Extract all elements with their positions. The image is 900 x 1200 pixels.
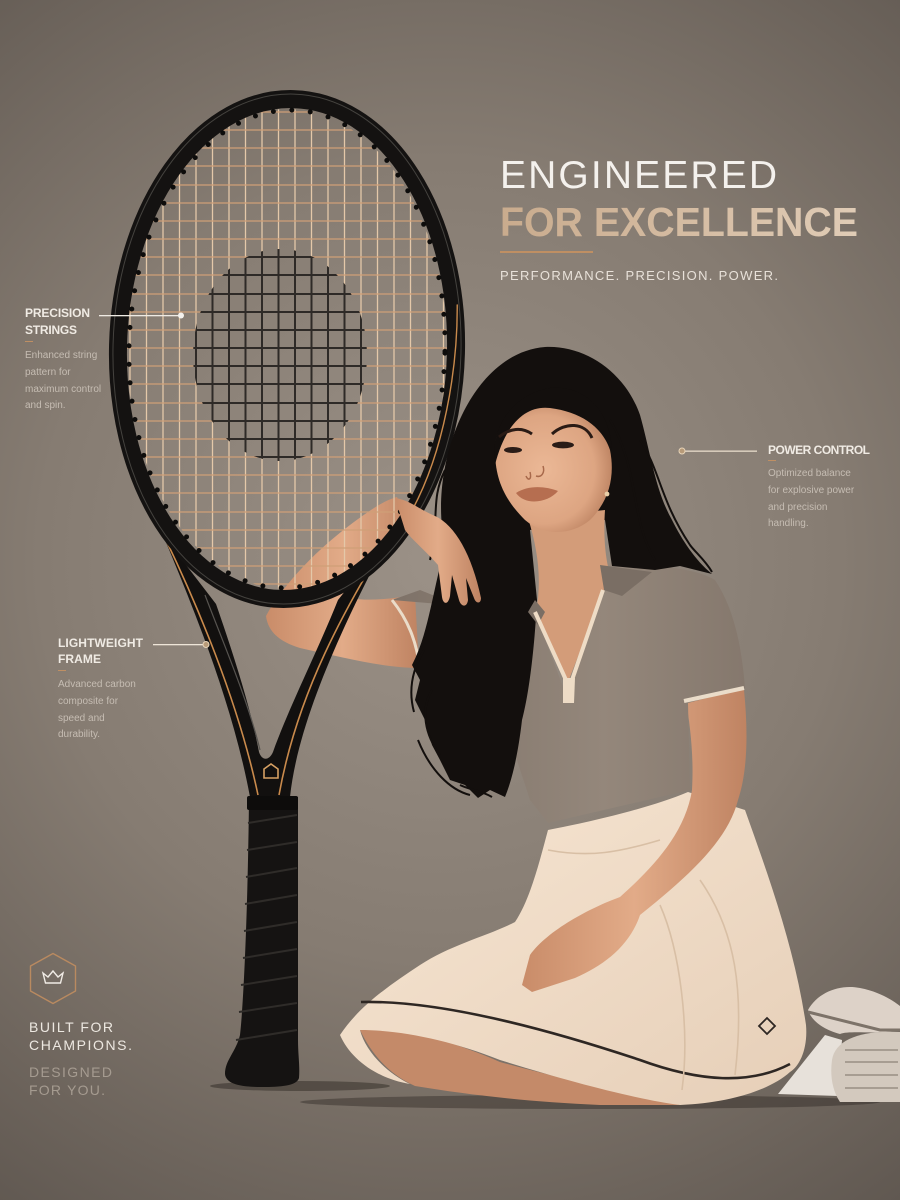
collar and placket bbox=[528, 565, 652, 703]
racket butt cap and grip bbox=[225, 796, 299, 1087]
seated woman bbox=[340, 347, 900, 1105]
sign-off secondary: DESIGNED bbox=[29, 1064, 112, 1080]
shirt bbox=[392, 563, 745, 823]
hair bbox=[412, 347, 712, 798]
callout heading: POWER CONTROL bbox=[768, 443, 870, 457]
title line 1: ENGINEERED bbox=[500, 154, 777, 197]
callout description: and precision bbox=[768, 502, 827, 513]
callout description: composite for bbox=[58, 696, 119, 707]
icon: hexagon crown bbox=[30, 954, 76, 1004]
woman's arm behind racket bbox=[266, 497, 419, 668]
leader line bbox=[99, 315, 179, 316]
legs bbox=[360, 1029, 680, 1105]
callout description: pattern for bbox=[25, 367, 71, 378]
callout description: speed and bbox=[58, 713, 105, 724]
tagline: PERFORMANCE. PRECISION. POWER. bbox=[500, 268, 778, 283]
front hair lock bbox=[494, 388, 612, 465]
callout: precision strings bbox=[25, 306, 184, 411]
brand sign-off bbox=[29, 954, 132, 1098]
callout description: Optimized balance bbox=[768, 468, 851, 479]
shoes and sock bbox=[778, 987, 900, 1102]
callout: lightweight frame bbox=[58, 636, 209, 740]
heading dash bbox=[25, 341, 33, 342]
face bbox=[495, 407, 612, 532]
callout description: durability. bbox=[58, 729, 100, 740]
sign-off tagline: BUILT FOR bbox=[29, 1019, 113, 1035]
chest and neck bbox=[528, 510, 610, 682]
callout description: Advanced carbon bbox=[58, 679, 136, 690]
callout heading: LIGHTWEIGHT bbox=[58, 636, 144, 650]
callout description: handling. bbox=[768, 518, 809, 529]
heading dash bbox=[768, 460, 776, 461]
racket strings bbox=[120, 100, 455, 600]
racket throat and shaft bbox=[163, 532, 392, 797]
facial features bbox=[499, 425, 592, 501]
callout description: Enhanced string bbox=[25, 350, 97, 361]
floor shadows bbox=[210, 1081, 880, 1109]
crown badge bbox=[264, 764, 278, 778]
callout heading: PRECISION bbox=[25, 306, 90, 320]
callout description: for explosive power bbox=[768, 485, 855, 496]
title line 2: FOR EXCELLENCE bbox=[500, 199, 858, 245]
leader line bbox=[685, 450, 757, 452]
skirt bbox=[340, 792, 806, 1105]
leader dot bbox=[679, 448, 685, 454]
sign-off secondary: FOR YOU. bbox=[29, 1082, 105, 1098]
string stencil logo bbox=[193, 249, 367, 461]
leader dot bbox=[203, 642, 209, 648]
callout heading: FRAME bbox=[58, 652, 101, 666]
callout description: and spin. bbox=[25, 400, 66, 411]
callout heading: STRINGS bbox=[25, 323, 77, 337]
tennis racket bbox=[106, 90, 468, 1087]
heading dash bbox=[58, 670, 66, 671]
hair strands bbox=[411, 420, 712, 797]
callout description: maximum control bbox=[25, 384, 101, 395]
title block bbox=[500, 154, 858, 283]
leader line bbox=[153, 644, 203, 645]
right arm and hand bbox=[522, 690, 746, 992]
leader dot bbox=[178, 312, 184, 318]
sign-off tagline: CHAMPIONS. bbox=[29, 1037, 132, 1053]
callout: power control bbox=[679, 443, 870, 529]
earring bbox=[605, 492, 609, 496]
racket hoop bbox=[106, 90, 468, 608]
accent rule bbox=[500, 251, 593, 253]
hand on racket bbox=[395, 498, 481, 606]
